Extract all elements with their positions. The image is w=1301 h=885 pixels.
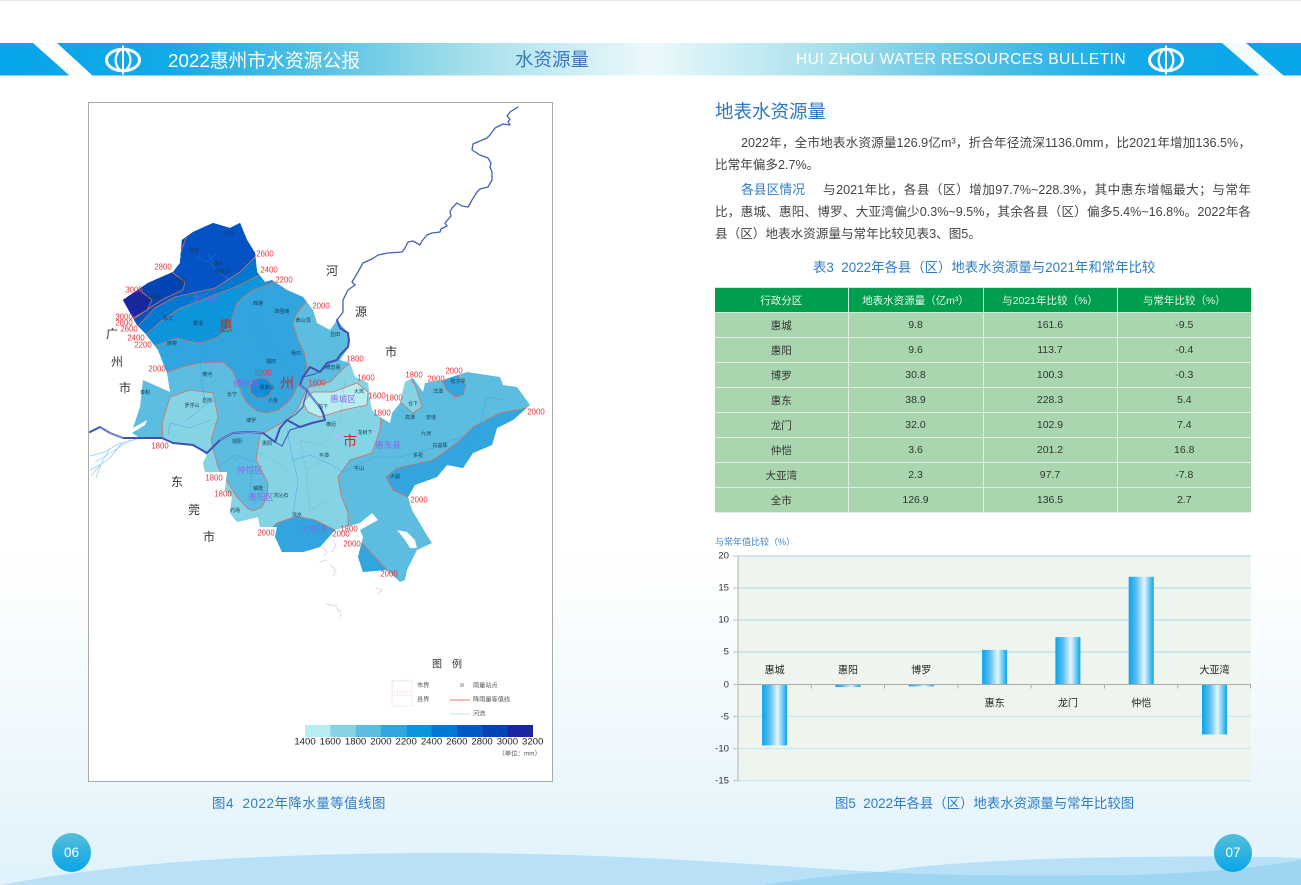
category labels: 仲恺 [1131,696,1151,710]
category labels: 博罗 [911,664,931,676]
neighbouring city labels: 广 [106,327,118,341]
rainfall station labels: 观家山 [259,384,275,391]
rainfall station labels: 柏下 [318,403,328,410]
zero axis [738,684,1251,688]
data table: 30.8 [905,369,926,381]
y axis values: 0 [724,680,729,690]
rainfall station labels: 显岗 [202,398,212,404]
neighbouring city labels: 东 [171,475,183,489]
data table: 38.9 [905,394,926,406]
neighbouring city labels: 州 [111,355,123,369]
rainfall station labels: 博罗 [246,417,256,424]
rainfall station labels: 庞头 [214,260,224,267]
data table: 2.3 [908,469,923,481]
contour labels: 2600 [256,250,274,258]
rainfall station labels: 横河 [202,371,212,378]
contour labels: 2000 [332,530,350,538]
contour labels: 2000 [527,408,545,416]
rainfall station labels: 上坪 [132,298,142,305]
rainfall station labels: 长宁 [227,391,237,398]
data table: 100.3 [1037,369,1063,381]
data table: -7.8 [1175,469,1193,481]
header section title: 水资源量 [515,49,589,70]
rainfall station labels: 永汉 [163,315,173,322]
rainfall station labels: 杨村 [291,350,301,357]
contour labels: 2800 [115,318,133,328]
data table: 161.6 [1037,319,1063,331]
y axis values: 20 [718,550,729,562]
page number 06: 06 [64,845,79,860]
colour scale bar: 2200 [396,736,417,748]
colour scale bar: 2600 [446,736,467,748]
rainfall station labels: 洋潭 [433,388,443,395]
heading: surface water resources: 地表水资源量 [715,101,826,122]
contour labels: 1800 [151,442,169,450]
y axis values: 15 [718,582,729,594]
data table: 228.3 [1037,394,1063,406]
category labels [765,664,1230,710]
colour scale bar: （单位：mm） [498,748,541,758]
contour labels: 1600 [308,378,326,388]
contour labels: 2000 [343,540,361,548]
rainfall station labels: 黄山洞 [295,317,311,324]
rainfall station labels: 合下 [408,400,418,407]
data table [715,287,1251,513]
data table: 102.9 [1037,419,1063,431]
data table: 32.0 [905,419,926,431]
district labels: 惠东县 [375,439,401,450]
category labels: 龙门 [1058,696,1078,710]
contour labels: 2000 [380,570,398,578]
rainfall station labels: 江南 [224,230,234,237]
contour labels: 1800 [373,408,391,418]
panel: rainfall contour map [88,102,553,782]
text block: summary paragraphs: 2022年，全市地表水资源量126.9亿m³，折合年径流深1136.0mm，比2021年增加136.5%， [741,136,1251,150]
data table: 惠东 [771,394,792,406]
contour labels: 1800 [205,474,223,482]
page number 07: 07 [1225,845,1241,860]
county boundaries [198,332,345,510]
map legend: 例 [452,658,462,670]
data table: -9.5 [1175,319,1193,331]
data table: 仲恺 [771,444,792,456]
rainfall bands [123,223,530,582]
coastal inlet [397,530,417,548]
district labels: 惠阳区 [248,491,274,502]
rainfall station labels: 观阳 [232,438,242,445]
data table: 9.6 [908,344,923,356]
header title left: 2022惠州市水资源公报 [168,50,360,71]
rainfall station labels: 四围坡 [274,308,290,315]
contour labels: 3000 [115,312,133,322]
delta rivers [90,439,137,478]
band background with diagonal stripes [0,43,1301,76]
district labels [192,292,401,534]
caption: figure 5: 图5 2022年各县（区）地表水资源量与常年比较图 [835,796,1134,811]
data table: 113.7 [1037,344,1063,356]
map legend: 降雨量等值线 [473,696,510,704]
colour scale bar: 1600 [320,736,341,748]
rainfall station labels: 平山 [354,465,364,472]
contour labels: 2000 [410,496,428,504]
rainfall station labels: 九洲 [421,430,431,437]
category labels: 大亚湾 [1200,664,1230,676]
contour labels: 2200 [275,276,293,284]
rainfall station labels: 铁岗 [176,277,186,284]
neighbouring city labels: 莞 [188,503,200,517]
data table: 9.8 [908,319,923,331]
contour labels: 2000 [312,302,330,310]
rainfall station labels: 横沥 [326,421,336,428]
data table: 97.7 [1040,469,1060,481]
map legend: 县界 [417,696,429,704]
rainfall station labels: 白盆珠 [432,442,448,449]
district labels: 龙门县 [192,292,218,303]
page number 06 [52,833,91,872]
y axis values: 10 [718,614,729,626]
rainfall station labels: 显田 [330,332,340,338]
district labels: 仲恺区 [237,464,263,475]
contour labels: 2800 [154,262,172,272]
rainfall station labels: 泰和 [140,389,150,396]
rainfall station labels: 天堂山 [214,268,230,275]
rainfall station labels: 麻榨 [167,340,177,347]
rainfall station labels: 观音阁 [325,364,341,371]
data table: 2.7 [1177,494,1192,506]
rainfall station labels: 香溪 [193,320,203,327]
category labels: 惠阳 [838,664,858,676]
y axis values: -5 [720,712,729,722]
data table: 大亚湾 [766,470,797,482]
rainfall station labels: 七星墩 [145,294,161,301]
data table: 16.8 [1174,444,1194,456]
contour labels: 2400 [260,266,278,274]
rainfall station labels: 罗浮山 [184,402,200,409]
islands [320,540,382,618]
contour labels [115,250,545,578]
data table: 行政分区 [760,294,802,306]
chart axis title: 与常年值比较（%） [715,536,795,547]
neighbouring city labels: 市 [119,380,131,395]
colour scale bar: 3200 [522,736,543,748]
map legend: 雨量站点 [473,682,498,690]
rainfall station labels: 西港 [253,300,263,307]
colour scale bar: 1800 [345,736,366,748]
text block: summary paragraphs [715,136,1251,241]
contour labels: 3000 [125,286,143,294]
data table: 全市 [771,494,792,506]
contour labels: 2400 [127,334,145,342]
header band [0,43,1301,76]
page number 07 [1214,834,1252,872]
rainfall station labels: 多祝 [413,452,423,459]
y axis values: -15 [715,776,729,786]
data table: -0.4 [1175,344,1193,356]
neighbouring city labels: 市 [203,529,215,544]
y axis values: -10 [715,744,729,754]
city name labels: 惠 [219,318,233,334]
data table: 与常年比较（%） [1143,294,1226,306]
neighbouring city labels: 市 [385,344,397,359]
y axis values: 5 [724,646,729,658]
map legend: 市界 [417,682,429,690]
category labels: 惠东 [985,696,1005,710]
caption: table 3: 表3 2022年各县（区）地表水资源量与2021年和常年比较 [813,260,1155,275]
data table: 博罗 [771,370,792,382]
colour scale bar: 2800 [471,736,493,748]
rainfall station labels: 大岚 [354,388,364,395]
city name labels: 州 [280,375,294,391]
contour labels: 2000 [257,528,275,538]
rainfall station labels: 大崩 [390,473,400,480]
header title english: HUI ZHOU WATER RESOURCES BULLETIN [796,51,1126,68]
map legend [392,658,510,718]
district labels: 惠城区 [330,393,356,404]
rainfall station labels: 稔子坪 [450,378,466,385]
colour scale bar: 2000 [370,736,392,748]
contour labels: 1600 [368,392,386,400]
rainfall station labels: 平潭 [319,452,329,459]
neighbouring city labels: 河 [326,264,338,278]
colour scale bar: 2400 [421,736,442,748]
data table: 龙门 [771,420,792,432]
colour scale bar [294,725,543,758]
inland rivers [168,253,503,515]
colour scale bar: 1400 [294,736,316,748]
map legend: 河流 [473,710,485,718]
east river [90,107,518,453]
colour scale bar: 3000 [497,736,518,748]
text block: summary paragraphs: 县（区）地表水资源量与常年比较见表3、图5。 [715,227,981,241]
city name labels [219,318,357,449]
rainfall station labels: 小金 [268,397,278,404]
icon: left logo [105,46,141,74]
data table: 136.5 [1037,494,1063,506]
rainfall station labels: 镇隆 [253,485,263,492]
contour labels: 1800 [346,354,364,364]
rainfall station labels: 高潭 [405,414,415,421]
text block: summary paragraphs: 比常年偏多2.7%。 [715,158,819,172]
contour labels: 1800 [340,524,358,534]
district labels: 大亚湾 [301,523,327,534]
y axis values [715,550,729,786]
rainfall station labels: 龙树下 [357,429,373,436]
rainfall station labels: 约场 [230,507,240,514]
contour labels: 1600 [357,374,375,382]
contour labels: 1800 [214,490,232,498]
neighbouring city labels: 源 [355,305,367,319]
city name labels: 市 [343,433,357,449]
caption: figure 4: 图4 2022年降水量等值线图 [212,796,386,811]
rainfall station labels [132,230,466,518]
rainfall station labels: 鸿沁石 [273,492,289,499]
data table: 惠阳 [771,344,792,356]
neighbouring city labels [106,264,397,544]
data table: 201.2 [1037,444,1063,456]
icon: right logo [1148,46,1184,74]
contour labels: 2000 [427,374,445,384]
data table: 地表水资源量（亿m³） [862,294,969,306]
contour labels: 2600 [120,324,138,334]
rainfall station labels: 福田 [266,358,276,365]
data table: -0.3 [1175,369,1193,381]
district labels: 博罗县 [233,378,259,389]
rainfall station labels: 地派 [189,247,199,254]
contour labels: 1800 [405,370,423,380]
data table: 3.6 [908,444,923,456]
bars [762,577,1227,745]
bar chart: departure from normal [715,536,1251,786]
rainfall station labels: 惠阳 [262,440,272,447]
contour labels: 2200 [134,340,152,350]
data table: 惠城 [771,320,792,332]
data table: 与2021年比较（%） [1002,294,1098,306]
rainfall station labels: 安墩 [426,414,436,421]
data table: 5.4 [1177,394,1192,406]
contour labels: 1800 [385,394,403,402]
rainfall station labels: 淡水 [292,511,302,518]
category labels: 惠城 [765,664,785,676]
text block: summary paragraphs: 各县区情况 [741,182,805,197]
data table: 126.9 [902,494,929,506]
data table: 7.4 [1177,419,1192,431]
contour labels: 2000 [445,366,463,376]
contour labels: 2000 [148,364,166,374]
map legend: 图 [432,658,442,670]
contour labels: 2200 [254,368,272,378]
footer waves [0,853,1301,885]
text block: summary paragraphs: 与2021年比，各县（区）增加97.7%~228.3%，其中惠东增幅最大；与常年 [823,183,1251,197]
text block: summary paragraphs: 比，惠城、惠阳、博罗、大亚湾偏少0.3%~9.5%，其余各县（区）偏多5.4%~16.8%。2022年各 [715,205,1251,219]
